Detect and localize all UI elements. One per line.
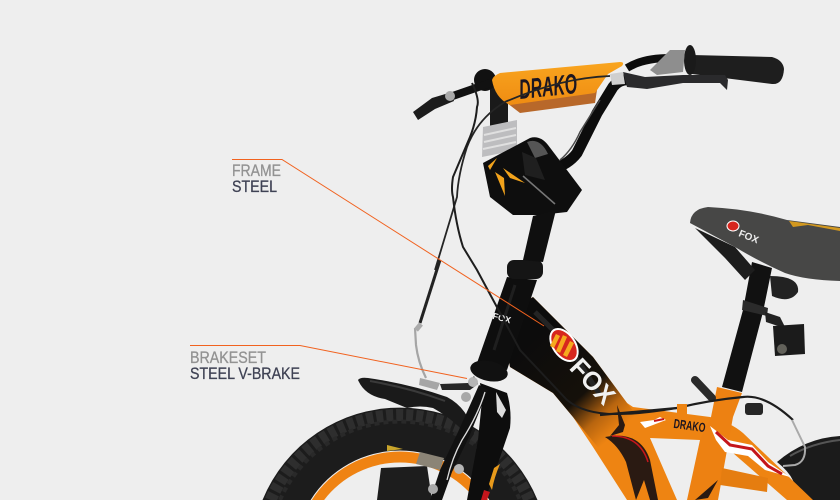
brakeset value: STEEL V-BRAKE [190,365,300,383]
flame decal [710,426,790,477]
hub [377,466,432,500]
front wheel [262,408,538,500]
frame label: FRAME [232,162,281,180]
small fox decal: FOX [492,311,512,325]
brake cables [415,76,805,466]
rear bolt [745,403,763,415]
steerer [523,210,556,262]
front fork [467,383,511,500]
main frame [507,297,813,500]
callout: frame [232,160,544,326]
rear reflector [765,312,805,356]
handlebar [447,58,670,170]
seat post [722,262,798,392]
saddle logo [727,221,739,231]
drako top tube text: DRAKO [673,416,707,435]
front fender [358,378,474,440]
frame value: STEEL [232,178,277,196]
frame leader line [232,160,544,326]
right grip [684,45,784,84]
head tube [468,260,543,385]
tyre [262,408,538,500]
kickstand stub [695,380,712,398]
rear wheel [777,436,840,500]
seat tube [687,387,742,500]
right brake lever [610,50,728,90]
left brake lever [413,91,455,120]
frame logo [543,323,622,411]
saddle [690,207,840,281]
arrow decal [640,417,666,428]
reflector [482,120,517,157]
rear stays [720,468,768,492]
lower collar [468,357,510,385]
brakeset leader line [190,346,467,378]
upper collar [507,260,543,279]
frame tribal decal [605,405,790,500]
pad wordmark: DRAKO [518,68,579,105]
brakeset label: BRAKESET [190,349,266,367]
handlebar pad [492,62,623,113]
fox wordmark: FOX [564,352,622,411]
saddle: FOX [737,228,760,246]
v-brake [419,376,488,500]
handlebar stem clamp [483,137,582,262]
rim [312,452,488,500]
callout: brakeset [190,346,467,383]
